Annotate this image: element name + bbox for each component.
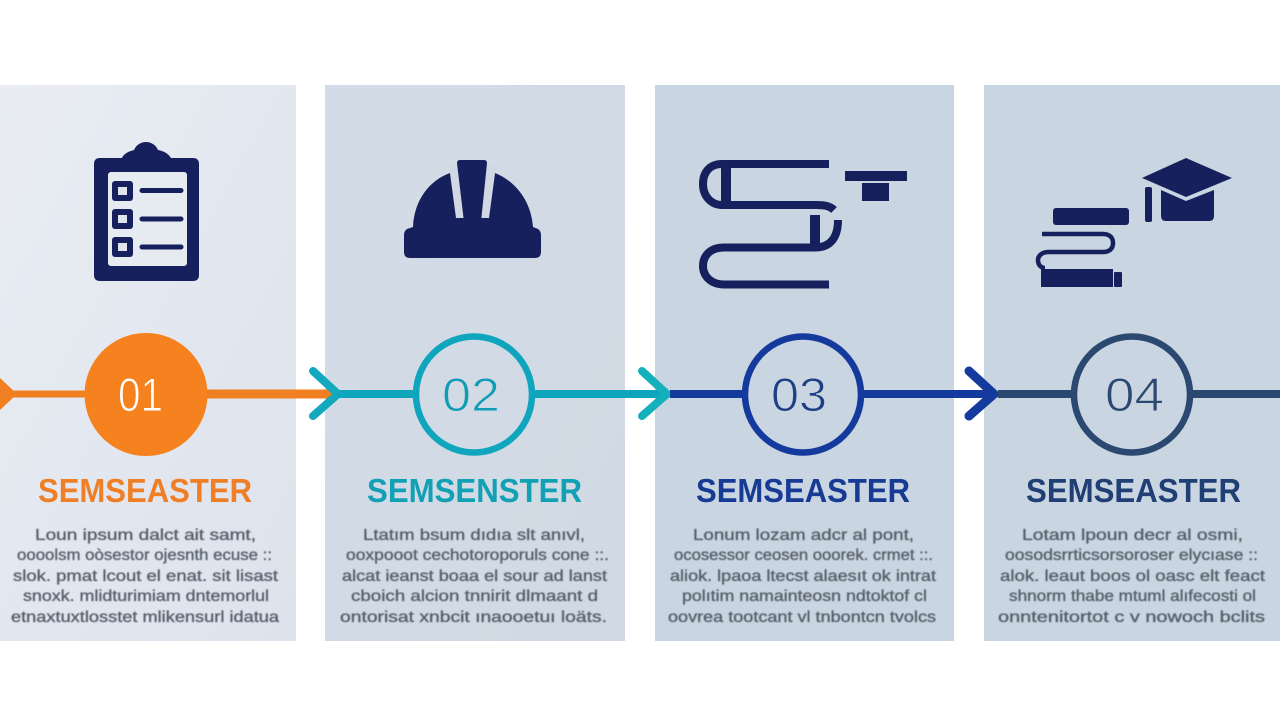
text block: semester 1: Loun ipsum dalct ait samt, [35,527,256,544]
text block: semester 2: ooxpooot cechotoroporuls cone ::. [346,547,609,564]
text block: semester 1: snoxk. mlidturimiam dntemorlul [23,588,269,605]
text block: semester 3: aliok. lpaoa ltecst alaesıt ok intrat [670,568,937,585]
heading: semester 4: SEMSEASTER [1026,472,1241,509]
text block: semester 2: ontorisat xnbcit ınaooetuı loäts. [340,609,607,626]
text block: semester 3 [668,527,937,626]
text block: semester 4: onntenitortot c v nowoch bclits [998,609,1265,626]
icon: books and graduation cap [1038,158,1232,287]
timeline segment: teal [338,390,665,398]
text block: semester 4: alok. leaut boos ol oasc elt feact [1000,568,1266,585]
text block: semester 1: etnaxtuxtlosstet mlikensurl idatua [11,609,279,626]
timeline segment: royal blue [670,390,992,398]
panel: semester 3 background [655,85,954,641]
text block: semester 3: polıtim namainteosn ndtoktof cl [682,588,927,605]
text block: semester 1 [11,527,279,626]
text block: semester 4: Lotam lpoun decr al osmi, [1022,527,1243,544]
heading: semester 2: SEMSENSTER [367,472,582,509]
text block: semester 2: Ltatım bsum dıdıa slt anıvl, [363,527,585,544]
step marker 02 [416,336,532,452]
heading: semester 3: SEMSEASTER [696,472,910,509]
text block: semester 1: oooolsm oòsestor ojesnth ecuse :: [17,547,272,564]
icon: hard hat [404,160,541,258]
step marker 04: 04 [1105,368,1164,421]
text block: semester 4: oosodsrrticsorsoroser elycıase :: [1005,547,1258,564]
icon: clipboard checklist [94,142,199,281]
panel: semester 1 background [0,85,296,641]
text block: semester 2: cboich alcion tnnirit dlmaant d [351,588,598,605]
step marker 03: 03 [771,368,827,421]
text block: semester 4: shnorm thabe mtuml alıfecosti ol [1009,588,1256,605]
text block: semester 4 [998,527,1266,626]
step marker 02: 02 [442,368,500,421]
step marker 01 [84,333,208,456]
panel: semester 4 background [984,85,1280,641]
arrow: royal blue chevron [969,371,994,416]
timeline segment: orange [0,378,332,410]
text block: semester 3: oovrea tootcant vl tnbontcn tvolcs [668,609,936,626]
arrow: teal chevron [313,371,338,416]
text block: semester 2 [340,527,609,626]
step marker 03 [745,336,861,452]
icon: books with cap outline [703,164,907,284]
step marker 04 [1074,336,1190,452]
text block: semester 3: ocosessor ceosen ooorek. crmet ::. [674,547,933,564]
text block: semester 2: alcat ieanst boaa el sour ad lanst [342,568,608,585]
panel: semester 2 background [325,85,625,641]
heading: semester 1: SEMSEASTER [38,472,252,509]
step marker 01: 01 [118,368,163,421]
arrow: teal chevron to semester 3 [642,371,667,416]
text block: semester 3: Lonum lozam adcr al pont, [693,527,914,544]
timeline segment: slate navy [998,390,1280,398]
text block: semester 1: slok. pmat lcout el enat. sit lisast [13,568,279,585]
